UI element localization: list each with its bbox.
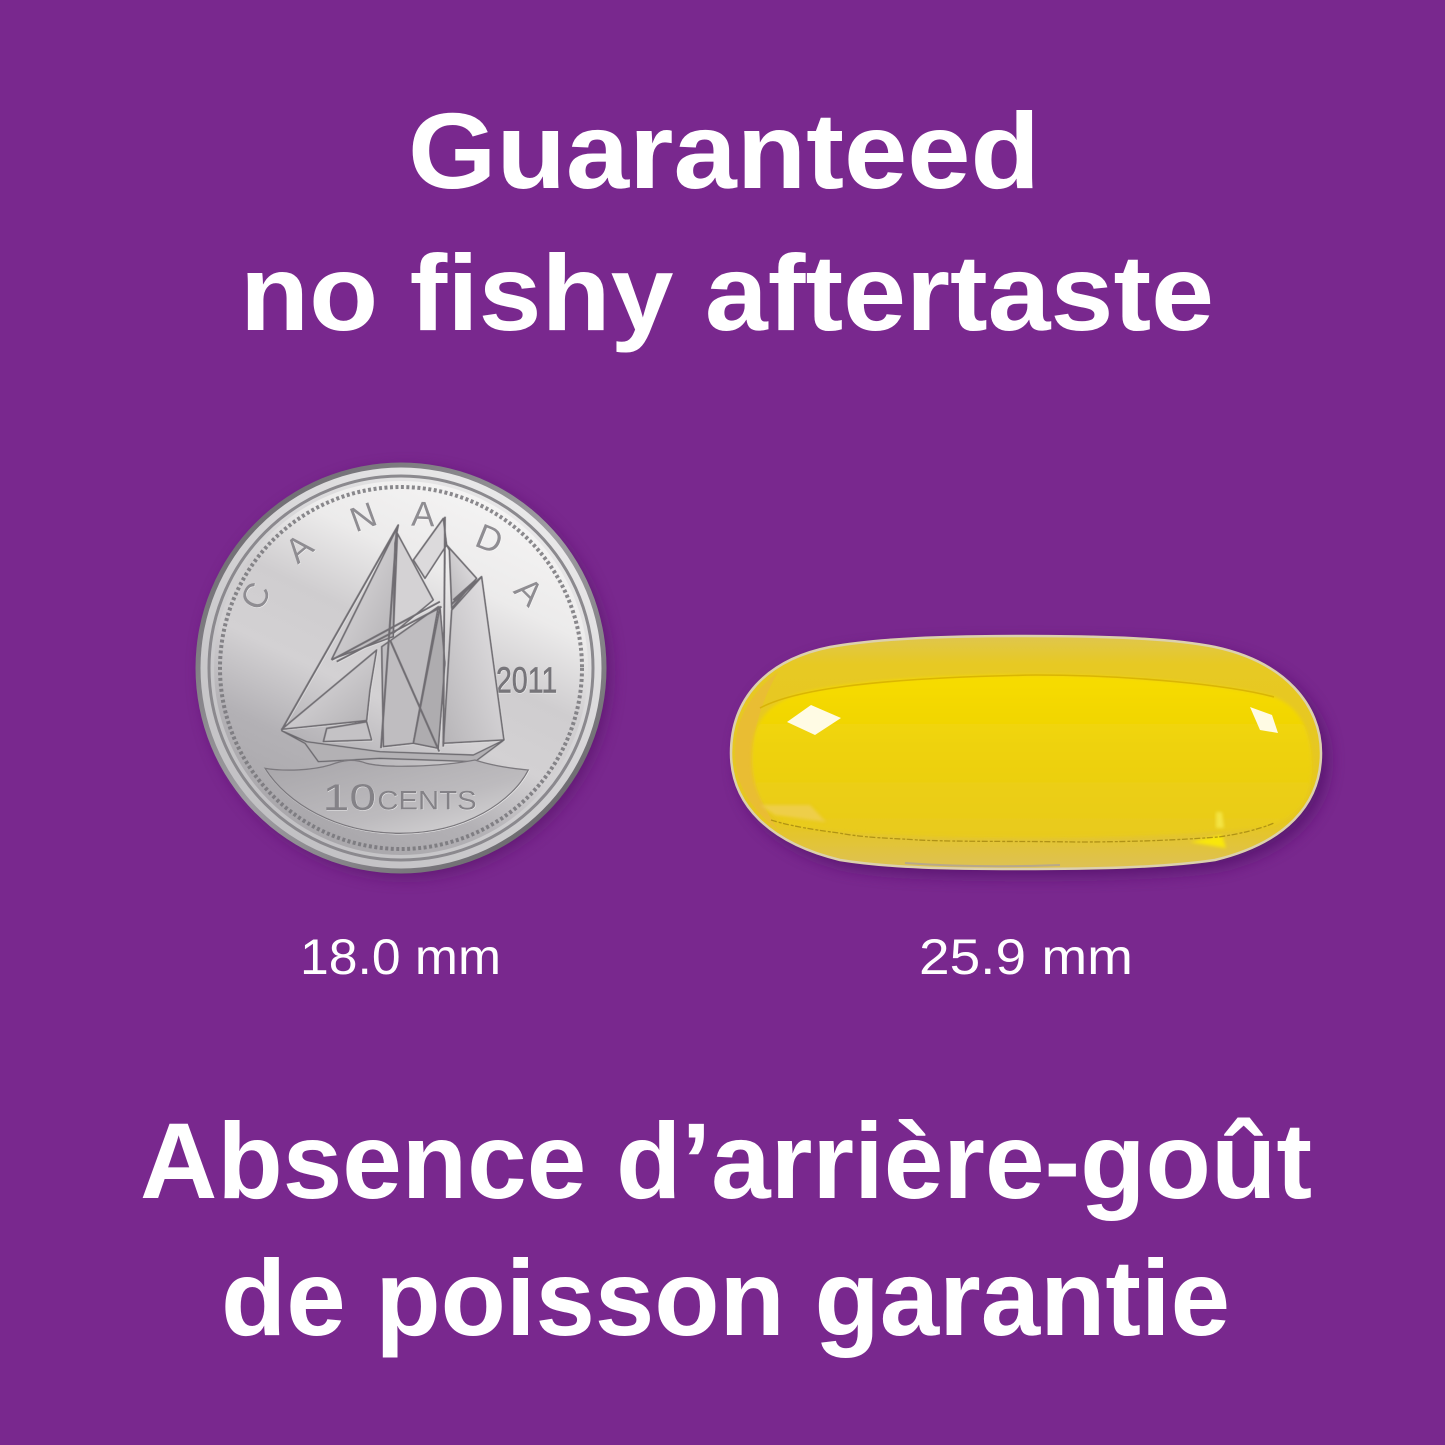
title: English: [240, 90, 1214, 353]
coin inscription: CANADA: D: [470, 517, 508, 562]
schooner hull: [282, 731, 504, 762]
coin inscription: CANADA: A: [411, 495, 436, 534]
icon: ten cent coin: [196, 462, 610, 877]
coin inscription: CANADA: A: [507, 570, 551, 614]
capsule oil core: [752, 675, 1312, 838]
capsule end glow: [735, 672, 778, 830]
capsule highlights: [787, 705, 841, 735]
title: English: Guaranteed: [408, 90, 1040, 211]
coin denomination: 10 CENTS: CENTS: [377, 785, 477, 815]
coin inscription: CANADA: N: [345, 495, 382, 540]
coin date: 2011: 2011: [496, 660, 557, 701]
icon: softgel capsule: [731, 636, 1328, 876]
title: French: Absence d’arrière-goût: [140, 1100, 1312, 1221]
coin inscription: CANADA: C: [233, 576, 279, 617]
schooner sails: [282, 517, 504, 752]
coin denomination: 10 CENTS: 10: [323, 776, 376, 818]
title: French: de poisson garantie: [221, 1237, 1230, 1358]
coin denomination: 10 CENTS: [323, 776, 477, 818]
label: coin diameter: 18.0 mm: [300, 929, 501, 985]
sea: [265, 760, 528, 833]
capsule seam: [771, 820, 1274, 842]
coin inscription: CANADA: [233, 495, 551, 617]
label: capsule length: 25.9 mm: [919, 929, 1133, 985]
title: French: [140, 1100, 1312, 1358]
coin inscription: CANADA: A: [278, 526, 321, 571]
title: English: no fishy aftertaste: [240, 232, 1214, 353]
